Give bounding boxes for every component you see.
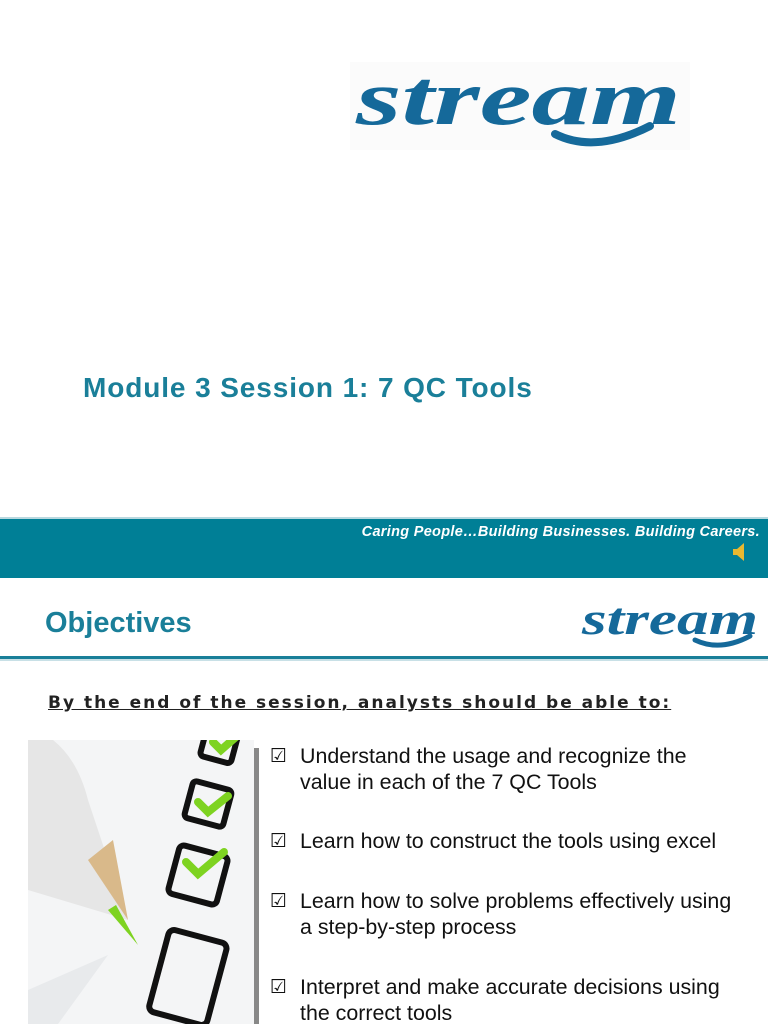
subheading: By the end of the session, analysts should be able to:	[48, 693, 671, 713]
item 4: Interpret and make accurate decisions using	[300, 975, 720, 999]
image: pencil checklist	[28, 740, 254, 1024]
item 1: ☑	[270, 745, 287, 767]
logo: stream small	[581, 596, 758, 648]
heading: Objectives: Objectives	[45, 607, 192, 639]
banner	[0, 517, 768, 578]
item 1: value in each of the 7 QC Tools	[300, 770, 597, 794]
logo: stream top	[350, 62, 690, 150]
item 3: ☑	[270, 890, 287, 912]
item 3	[270, 889, 731, 939]
item 4	[270, 975, 720, 1025]
title: Module 3 Session 1: 7 QC Tools	[83, 372, 533, 403]
icon: speaker	[733, 543, 744, 561]
item 2: Learn how to construct the tools using excel	[300, 829, 716, 853]
item 4: ☑	[270, 976, 287, 998]
item 2: ☑	[270, 830, 287, 852]
tagline: Caring People…Building Businesses. Building Careers.	[362, 524, 760, 540]
item 1: Understand the usage and recognize the	[300, 744, 686, 768]
item 3: a step-by-step process	[300, 915, 516, 939]
item 3: Learn how to solve problems effectively using	[300, 889, 731, 913]
item 1	[270, 744, 686, 794]
divider bar	[254, 748, 259, 1024]
item 4: the correct tools	[300, 1001, 452, 1025]
